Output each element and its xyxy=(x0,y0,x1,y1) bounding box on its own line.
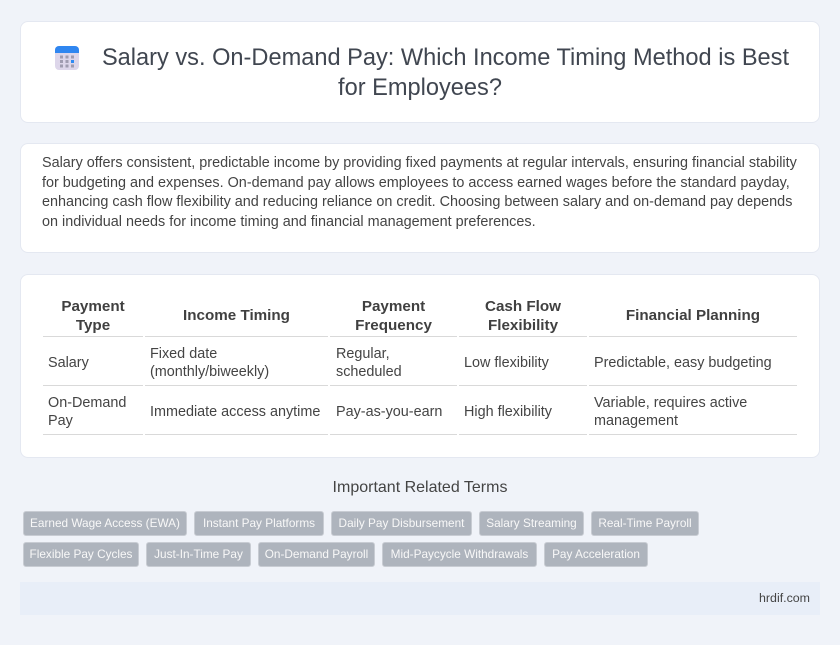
header: Cash Flow Flexibility xyxy=(485,298,561,334)
tag: Flexible Pay Cycles xyxy=(30,547,132,561)
table card xyxy=(20,274,820,458)
tag xyxy=(331,511,472,536)
row: On-Demand Pay: Immediate access anytime xyxy=(150,404,320,420)
tag xyxy=(23,542,139,567)
description text: enhancing cash flow flexibility and reducing reliance on credit. Choosing between salary and on-demand pay depends xyxy=(42,194,792,210)
tag: Instant Pay Platforms xyxy=(203,516,315,530)
header: Payment Type: Payment xyxy=(61,298,125,315)
header: Payment Frequency xyxy=(355,298,432,334)
tag xyxy=(544,542,648,567)
tag: Earned Wage Access (EWA) xyxy=(30,516,180,530)
tag: Real-Time Payroll xyxy=(598,516,692,530)
related term tags xyxy=(23,511,699,567)
row: On-Demand Pay: management xyxy=(594,413,678,429)
comparison table xyxy=(43,298,797,435)
title xyxy=(102,45,789,101)
row: Salary: Predictable, easy budgeting xyxy=(594,355,772,371)
tag xyxy=(146,542,251,567)
tag: Daily Pay Disbursement xyxy=(339,516,464,530)
tag: Pay Acceleration xyxy=(552,547,640,561)
description text: for budgeting and expenses. On-demand pay allows employees to access earned wages before the standard payday, xyxy=(42,175,790,191)
tag xyxy=(382,542,537,567)
tag: Mid-Paycycle Withdrawals xyxy=(391,547,528,561)
row: On-Demand Pay: On-Demand xyxy=(48,395,126,411)
tag xyxy=(194,511,324,536)
description card xyxy=(20,143,820,253)
tag: Just-In-Time Pay xyxy=(154,547,243,561)
row: Salary: scheduled xyxy=(336,364,402,380)
tag xyxy=(258,542,375,567)
header: Payment Type xyxy=(61,298,125,334)
description text: Salary offers consistent, predictable income by providing fixed payments at regular intervals, ensuring financial stability xyxy=(42,155,797,171)
row: Salary: Low flexibility xyxy=(464,355,549,371)
header: Cash Flow Flexibility: Flexibility xyxy=(488,317,558,334)
header: Payment Type: Type xyxy=(76,317,110,334)
row: Salary xyxy=(48,346,772,380)
row: On-Demand Pay: High flexibility xyxy=(464,404,552,420)
row: Salary: Salary xyxy=(48,355,89,371)
title: Salary vs. On-Demand Pay: Which Income Timing Method is Best xyxy=(102,45,789,71)
related terms heading: Important Related Terms xyxy=(333,479,507,496)
row: On-Demand Pay: Pay-as-you-earn xyxy=(336,404,442,420)
header: Payment Frequency: Frequency xyxy=(355,317,432,334)
row: On-Demand Pay: Pay xyxy=(48,413,73,429)
tag xyxy=(479,511,584,536)
header: Cash Flow Flexibility: Cash Flow xyxy=(485,298,561,315)
title: for Employees? xyxy=(338,75,502,101)
tag: On-Demand Payroll xyxy=(265,547,368,561)
row: On-Demand Pay xyxy=(48,395,747,429)
row: Salary: (monthly/biweekly) xyxy=(150,364,269,380)
footer bar xyxy=(20,582,820,615)
icon: calendar xyxy=(55,46,79,70)
row: On-Demand Pay: Variable, requires active xyxy=(594,395,747,411)
tag: Salary Streaming xyxy=(486,516,577,530)
header: Financial Planning: Financial Planning xyxy=(626,307,760,324)
tag xyxy=(591,511,699,536)
description text xyxy=(42,155,797,230)
tag xyxy=(23,511,187,536)
header: Payment Frequency: Payment xyxy=(362,298,425,315)
title card xyxy=(20,21,820,123)
description text: on individual needs for income timing and financial management preferences. xyxy=(42,214,536,230)
footer source: hrdif.com xyxy=(759,591,810,605)
row: Salary: Fixed date xyxy=(150,346,217,362)
header: Income Timing: Income Timing xyxy=(183,307,290,324)
row: Salary: Regular, xyxy=(336,346,390,362)
